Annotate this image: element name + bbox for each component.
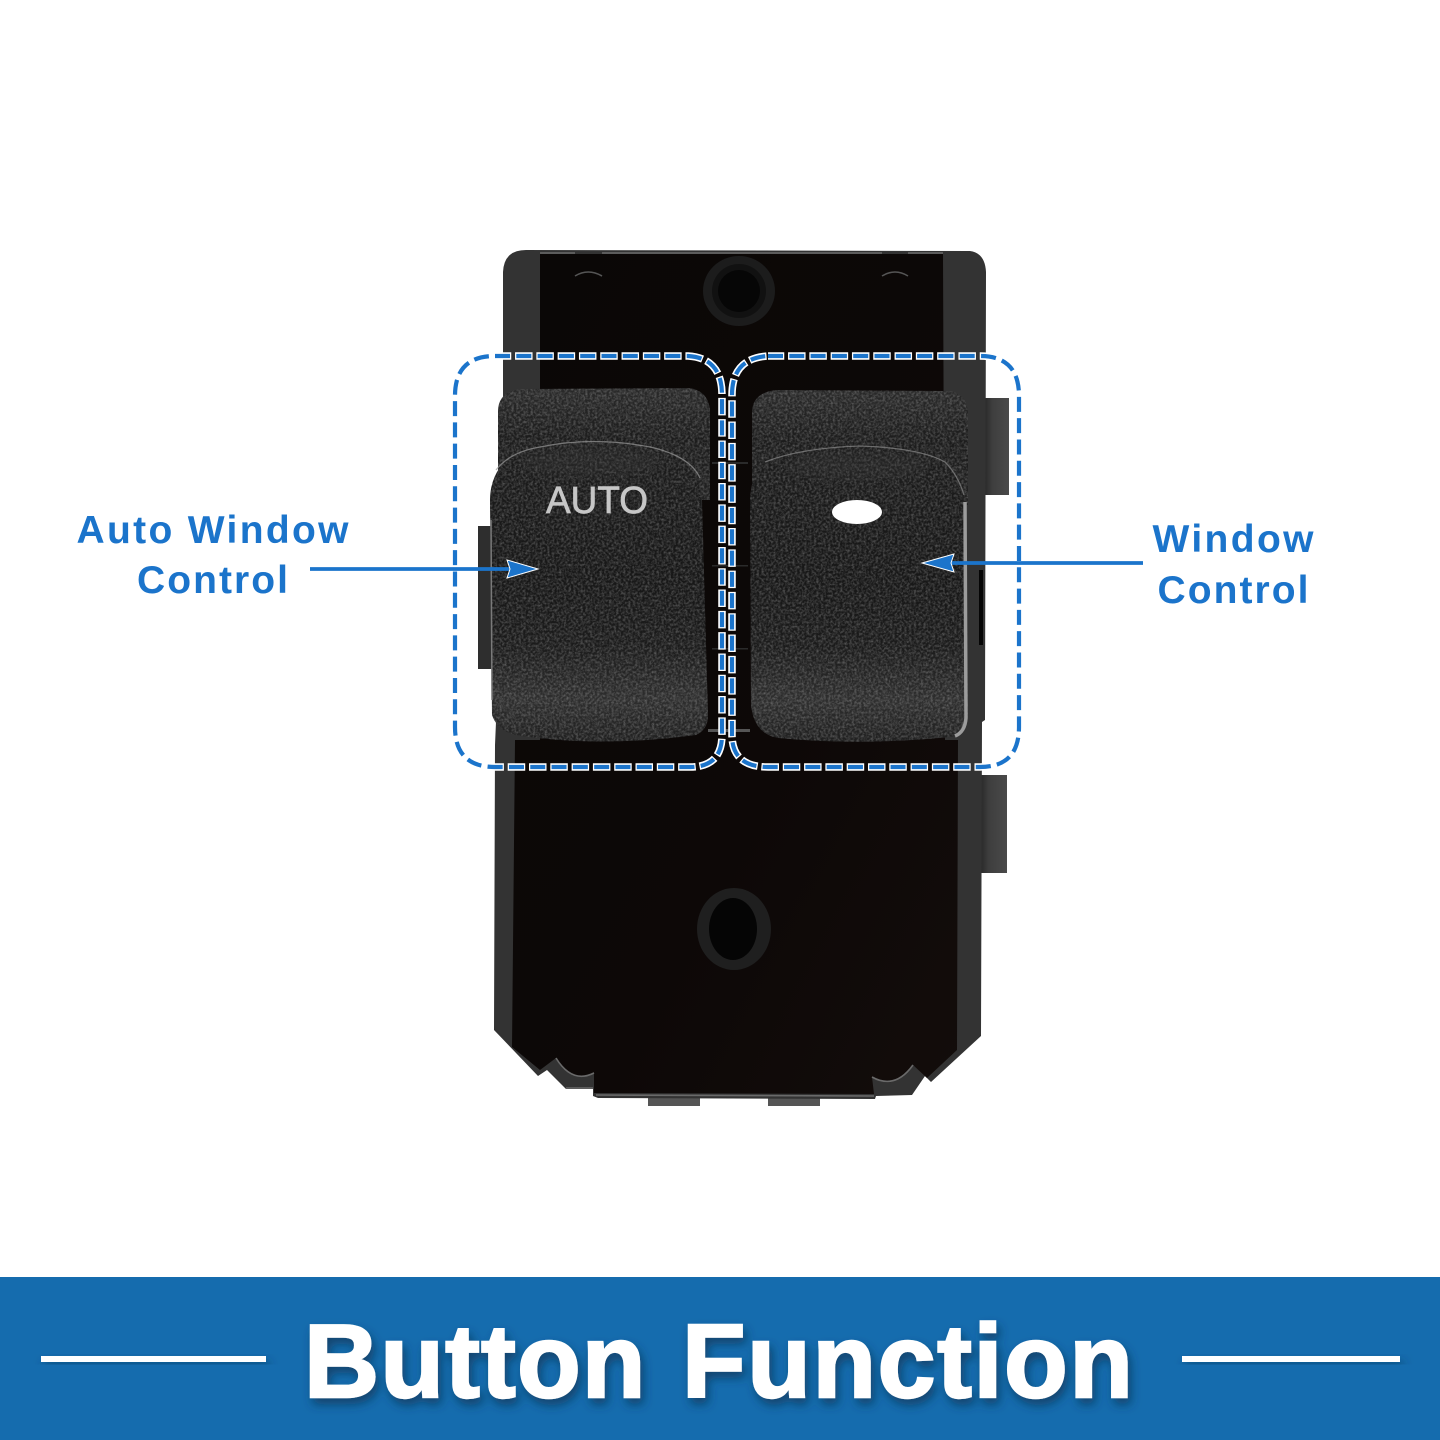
banner rule right (1182, 1356, 1400, 1362)
switch housing (494, 250, 986, 1099)
housing centre panel (512, 254, 958, 1094)
right rocker: rear (752, 390, 968, 505)
banner rule left (41, 1356, 266, 1362)
side tabs (478, 398, 1009, 873)
label: window control: Window (1152, 518, 1314, 561)
window marking: white oval (832, 500, 882, 524)
AUTO marking: AUTO (546, 480, 648, 522)
label: auto window control (76, 509, 349, 602)
bottom screw post (697, 888, 771, 970)
banner title (304, 1304, 1135, 1420)
left rocker shading and edge (491, 442, 700, 700)
arrow: window control (922, 554, 1143, 572)
top screw post (703, 256, 775, 326)
label: window control (1152, 518, 1314, 612)
dashed highlight: window button (732, 356, 1019, 767)
label: auto window control: Auto Window (76, 509, 349, 552)
housing highlight edges (540, 253, 943, 1096)
dashed highlight: auto window button (455, 356, 722, 767)
label: auto window control: Control (137, 559, 288, 602)
arrow: auto window control (310, 560, 538, 578)
gap bars between rockers (708, 462, 750, 732)
left rocker: front (490, 440, 708, 742)
banner title: Function (682, 1304, 1135, 1420)
right rocker shading and edge (765, 446, 981, 736)
left rocker: rear (498, 388, 710, 500)
product photo: window switch (478, 250, 1009, 1106)
label: window control: Control (1158, 569, 1308, 612)
title banner (0, 1277, 1440, 1440)
right rocker: front (750, 444, 968, 742)
bottom pegs (648, 1096, 820, 1106)
banner title: Button (304, 1304, 647, 1420)
